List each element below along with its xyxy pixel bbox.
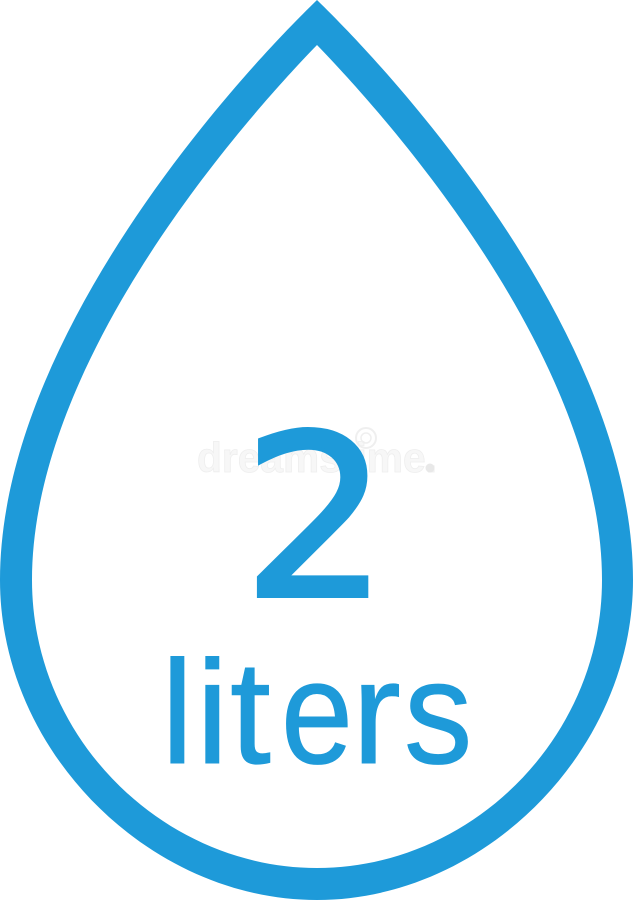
label: liters: r: [352, 631, 401, 795]
label: liters: l: [161, 631, 194, 795]
label: liters: t: [230, 631, 271, 795]
label: liters: i: [196, 631, 229, 795]
label: liters: [161, 631, 472, 795]
watermark: dreamstime.: [197, 434, 437, 481]
number: 2: 2: [242, 387, 389, 649]
label: liters: s: [404, 631, 472, 795]
label: liters: e: [281, 631, 353, 795]
